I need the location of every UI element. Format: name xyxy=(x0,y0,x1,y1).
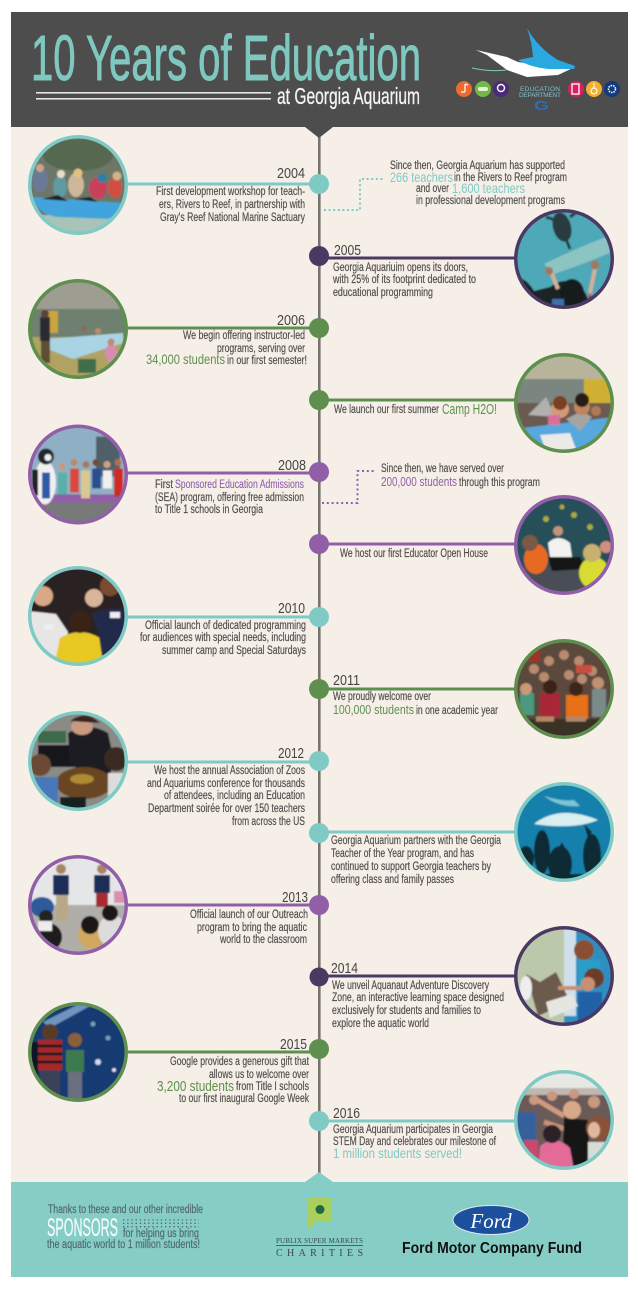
entry 2015: from Title I schools xyxy=(236,1081,309,1093)
entry 2016: Georgia Aquarium participates in Georgia xyxy=(333,1124,493,1136)
entry 2011: 2011 xyxy=(333,673,360,689)
program icons xyxy=(456,81,620,97)
entry 2008: to Title 1 schools in Georgia xyxy=(155,504,263,516)
photo 2012b: beluga whale xyxy=(514,782,614,882)
entry 2011: in one academic year xyxy=(416,705,498,717)
sponsors thanks text: SPONSORS xyxy=(47,1214,118,1242)
photo 2005: diver and kids xyxy=(514,209,614,309)
callout: teachers supported: 266 teachers xyxy=(390,169,453,185)
entry 2008: 2008 xyxy=(278,458,306,474)
entry 2010: Official launch of dedicated programming xyxy=(145,620,306,632)
header banner xyxy=(11,12,628,138)
entry 2006: We begin offering instructor-led xyxy=(183,330,305,342)
entry 2005 xyxy=(332,243,476,299)
entry 2006 xyxy=(146,313,307,367)
entry 2008: (SEA) program, offering free admission xyxy=(155,492,304,504)
entry 2004: First development workshop for teach- xyxy=(156,186,305,198)
entry 2015 xyxy=(157,1037,310,1105)
callout: teachers supported: 1,600 teachers xyxy=(452,180,525,196)
logo: Publix Super Markets Charities: CHARITIES xyxy=(276,1248,363,1259)
entry 2006: 2006 xyxy=(277,313,305,329)
callout: SEA students served: Since then, we have served over xyxy=(381,463,504,475)
entry 2013 xyxy=(190,890,308,946)
entry 2016: STEM Day and celebrates our milestone of xyxy=(333,1136,497,1148)
logo: manta ray education department: DEPARTMENT xyxy=(519,92,561,99)
photo 2010: special needs kids xyxy=(28,566,128,666)
entry 2011 xyxy=(333,673,498,717)
cream timeline panel xyxy=(11,127,628,1183)
entry 2016: 2016 xyxy=(333,1106,360,1122)
photo 2016: STEM Day crowd xyxy=(514,1070,614,1170)
subtitle with double rule: at Georgia Aquarium xyxy=(277,83,420,109)
entry 2015: allows us to welcome over xyxy=(209,1069,309,1081)
photo 2012: conference turtle shell xyxy=(28,711,128,811)
entry 2011: We proudly welcome over xyxy=(333,691,431,703)
entry 2016: 1 million students served! xyxy=(333,1145,462,1161)
timeline spine xyxy=(318,127,321,1183)
entry 2012: Department soirée for over 150 teachers xyxy=(148,803,305,815)
entry 2013: 2013 xyxy=(282,890,308,906)
entry 2010: 2010 xyxy=(278,601,305,617)
sponsors thanks text: Thanks to these and our other incredible xyxy=(48,1204,203,1216)
timeline nodes xyxy=(309,174,329,1131)
title: 10 Years of Education xyxy=(31,22,421,94)
photo 2013: outreach classroom xyxy=(28,855,128,955)
photo 2014: Aquanaut Adventure xyxy=(514,926,614,1026)
entry 2010 xyxy=(140,601,306,657)
dotted callout connector teal xyxy=(324,179,384,210)
entry 2015: 2015 xyxy=(280,1037,307,1053)
entry 2013: Official launch of our Outreach xyxy=(190,909,308,921)
callout: teachers supported: in the Rivers to Reef program xyxy=(454,172,567,184)
entry 2013: program to bring the aquatic xyxy=(197,922,307,934)
entry 2008 xyxy=(155,458,306,516)
entry Teacher of the Year xyxy=(331,835,501,886)
entry Camp H2O xyxy=(334,401,497,418)
entry 2008: Sponsored Education Admissions xyxy=(175,479,304,491)
entry 2010: for audiences with special needs, including xyxy=(140,632,306,644)
entry 2011: 100,000 students xyxy=(333,703,414,717)
entry 2014: Zone, an interactive learning space designed xyxy=(332,992,504,1004)
logo: manta ray education department: G xyxy=(534,98,549,113)
entry Educator Open House: We host our first Educator Open House xyxy=(340,548,488,560)
logo: Ford Motor Company Fund: Ford xyxy=(469,1209,512,1233)
logo: Publix Super Markets Charities: PUBLIX SUPER MARKETS xyxy=(276,1237,363,1245)
sponsors thanks text xyxy=(47,1204,203,1251)
sponsors thanks text: for helping us bring xyxy=(123,1228,199,1240)
entry 2015: to our first inaugural Google Week xyxy=(179,1093,309,1105)
callout: teachers supported xyxy=(390,160,567,207)
logo: Ford Motor Company Fund xyxy=(402,1206,582,1257)
photo 2006: classroom xyxy=(28,279,128,379)
logo: Ford Motor Company Fund: Ford Motor Company Fund xyxy=(402,1240,582,1257)
entry 2012 xyxy=(147,746,305,828)
entry 2014: 2014 xyxy=(331,961,358,977)
callout: teachers supported: in professional development programs xyxy=(416,195,565,207)
entry 2004: 2004 xyxy=(277,166,305,182)
entry Teacher of the Year: Teacher of the Year program, and has xyxy=(331,848,474,860)
callout: teachers supported: and over xyxy=(416,183,449,195)
entry 2005: with 25% of its footprint dedicated to xyxy=(332,274,476,286)
entry 2010: summer camp and Special Saturdays xyxy=(162,645,306,657)
photo 2007: Camp H2O xyxy=(514,353,614,453)
logo: manta ray education department xyxy=(456,28,620,113)
callout: SEA students served: through this program xyxy=(459,477,540,489)
entry 2004 xyxy=(156,166,305,224)
dotted callout connector purple xyxy=(322,471,376,503)
photo 2004: rafting xyxy=(28,135,128,235)
entry 2004: Gray's Reef National Marine Sactuary xyxy=(160,212,305,224)
entry 2004: ers, Rivers to Reef, in partnership with xyxy=(159,199,305,211)
entry 2014: We unveil Aquanaut Adventure Discovery xyxy=(332,980,489,992)
entry Camp H2O: We launch our first summer xyxy=(334,404,439,416)
callout: teachers supported: Since then, Georgia Aquarium has supported xyxy=(390,160,565,172)
photo 2015: boys at aquarium window xyxy=(28,1002,128,1102)
entry 2015: 3,200 students xyxy=(157,1078,234,1095)
entry 2012: of attendees, including an Education xyxy=(164,790,305,802)
entry 2014: explore the aquatic world xyxy=(332,1018,429,1030)
logo: Publix Super Markets Charities xyxy=(276,1198,363,1259)
logo: manta ray education department: EDUCATION xyxy=(520,86,560,93)
entry 2006: programs, serving over xyxy=(217,343,305,355)
entry 2006: in our first semester! xyxy=(227,355,307,367)
entry 2008: First xyxy=(155,479,174,491)
callout: SEA students served: 200,000 students xyxy=(381,475,457,489)
entry Teacher of the Year: continued to support Georgia teachers by xyxy=(331,861,491,873)
entry 2005: educational programming xyxy=(333,287,433,299)
entry Camp H2O: Camp H2O! xyxy=(442,401,497,418)
callout: SEA students served xyxy=(381,463,540,489)
entry 2014 xyxy=(331,961,504,1030)
entry 2012: and Aquariums conference for thousands xyxy=(147,778,305,790)
entry 2012: We host the annual Association of Zoos xyxy=(154,765,305,777)
photo 2011: crowd of students xyxy=(514,639,614,739)
entry 2012: from across the US xyxy=(232,816,305,828)
entry 2013: world to the classroom xyxy=(219,934,307,946)
entry 2014: exclusively for students and families to xyxy=(332,1005,481,1017)
connector lines xyxy=(125,184,516,1121)
entry Teacher of the Year: offering class and family passes xyxy=(331,874,454,886)
entry 2015: Google provides a generous gift that xyxy=(170,1056,310,1068)
entry 2016 xyxy=(333,1106,497,1161)
photo 2009: Educator Open House xyxy=(514,495,614,595)
entry 2006: 34,000 students xyxy=(146,351,225,367)
entry 2005: Georgia Aquariuim opens its doors, xyxy=(333,262,468,274)
entry 2012: 2012 xyxy=(278,746,304,762)
entry 2005: 2005 xyxy=(334,243,361,259)
photo 2008: SEA kids and mascot xyxy=(28,424,128,524)
footer sponsors band xyxy=(11,1172,628,1277)
sponsors thanks text: the aquatic world to 1 million students! xyxy=(47,1239,200,1251)
entry Teacher of the Year: Georgia Aquarium partners with the Georgia xyxy=(331,835,501,847)
